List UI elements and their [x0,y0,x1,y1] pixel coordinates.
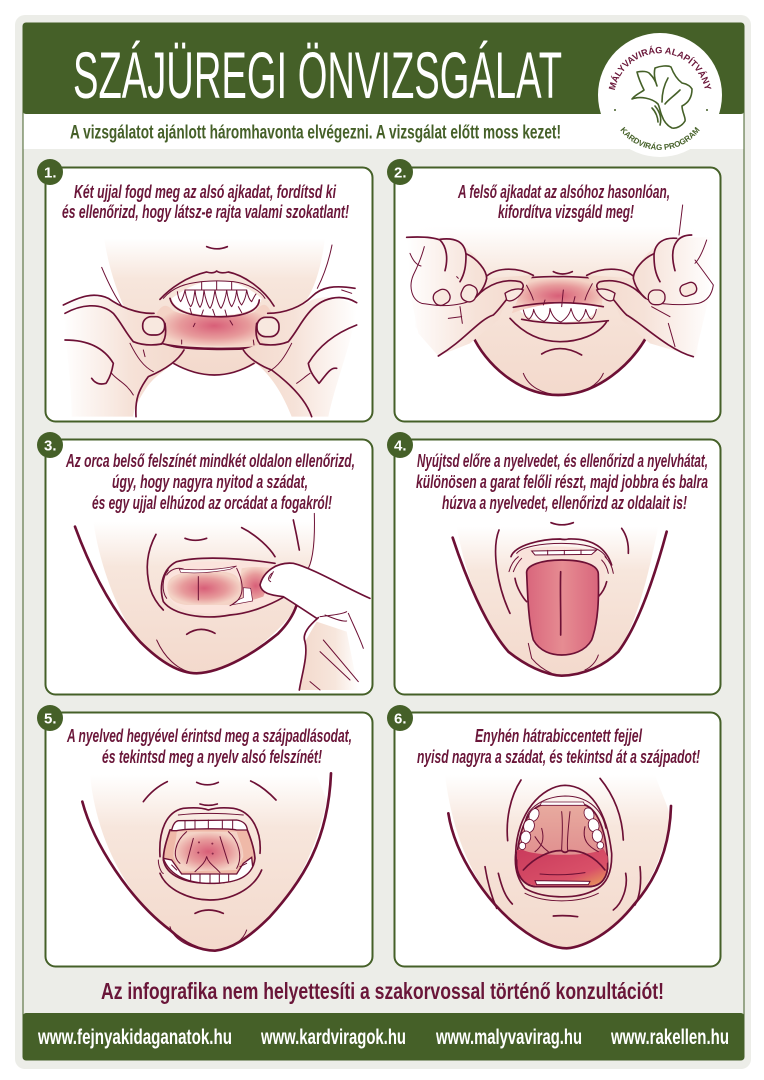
panel 1: lower lip [37,159,372,422]
instruction 1: Két ujjal fogd meg az alsó ajkadat, fordítsd ki [74,181,337,202]
right fist [587,235,713,357]
badge 3 [37,432,63,458]
panel 6: palate [387,705,720,966]
illustration 3 [75,513,370,690]
badge 1 [37,159,63,185]
instruction 6: Enyhén hátrabiccentett fejjel [475,725,643,746]
badge 4: 4. [394,438,407,454]
logo: KARDVIRÁG PROGRAM [620,126,700,150]
logo: MÁLYVAVIRÁG ALAPÍTVÁNY [608,46,712,90]
badge 4 [387,432,413,458]
instruction 5 [66,725,352,767]
left hand [63,295,184,417]
panel 4: tongue [387,432,720,694]
finger and hand [260,563,370,690]
instruction 3: és egy ujjal elhúzod az orcádat a fogakról! [92,492,332,513]
website links [37,1026,729,1049]
badge 1: 1. [44,164,57,182]
right hand [242,287,357,417]
instruction 1 [62,181,349,222]
instruction 1: és ellenőrizd, hogy látsz-e rajta valami szokatlant! [62,201,349,222]
instruction 4 [416,450,708,513]
badge 6: 6. [394,710,407,728]
instruction 3 [65,450,355,513]
badge 2 [387,159,413,185]
icon: flower [632,66,692,128]
footer [23,1013,744,1060]
instruction 6 [417,725,700,767]
badge 2: 2. [394,164,407,182]
left fist [407,237,533,356]
instruction 5: A nyelved hegyével érintsd meg a szájpadlásodat, [66,725,352,746]
panel 3: cheek [37,432,372,694]
instruction 2: kifordítva vizsgáld meg! [498,201,634,222]
subtitle band: A vizsgálatot ajánlott háromhavonta elvégezni. A vizsgálat előtt moss kezet! [70,122,561,144]
instruction 2 [457,181,670,222]
illustration 4 [453,523,667,676]
illustration 1 [63,238,357,417]
instruction 5: és tekintsd meg a nyelv alsó felszínét! [102,746,322,767]
badge 3: 3. [44,438,57,454]
header banner [23,23,744,114]
badge 5: 5. [44,710,57,728]
subtitle band [23,114,744,149]
instruction 3: úgy, hogy nagyra nyitod a szádat, [112,471,308,492]
illustration 2 [407,205,713,395]
website links: www.malyvavirag.hu [435,1026,582,1049]
illustration 5 [82,773,331,951]
panel 2: upper lip [387,159,720,422]
logo [598,33,722,157]
illustration 6 [445,775,671,948]
badge 6 [387,705,413,731]
badge 5 [37,705,63,731]
panel 5: under tongue [37,705,372,966]
instruction 3: Az orca belső felszínét mindkét oldalon ellenőrizd, [65,450,355,471]
website links: www.kardviragok.hu [260,1026,406,1049]
website links: www.fejnyakidaganatok.hu [37,1026,232,1049]
